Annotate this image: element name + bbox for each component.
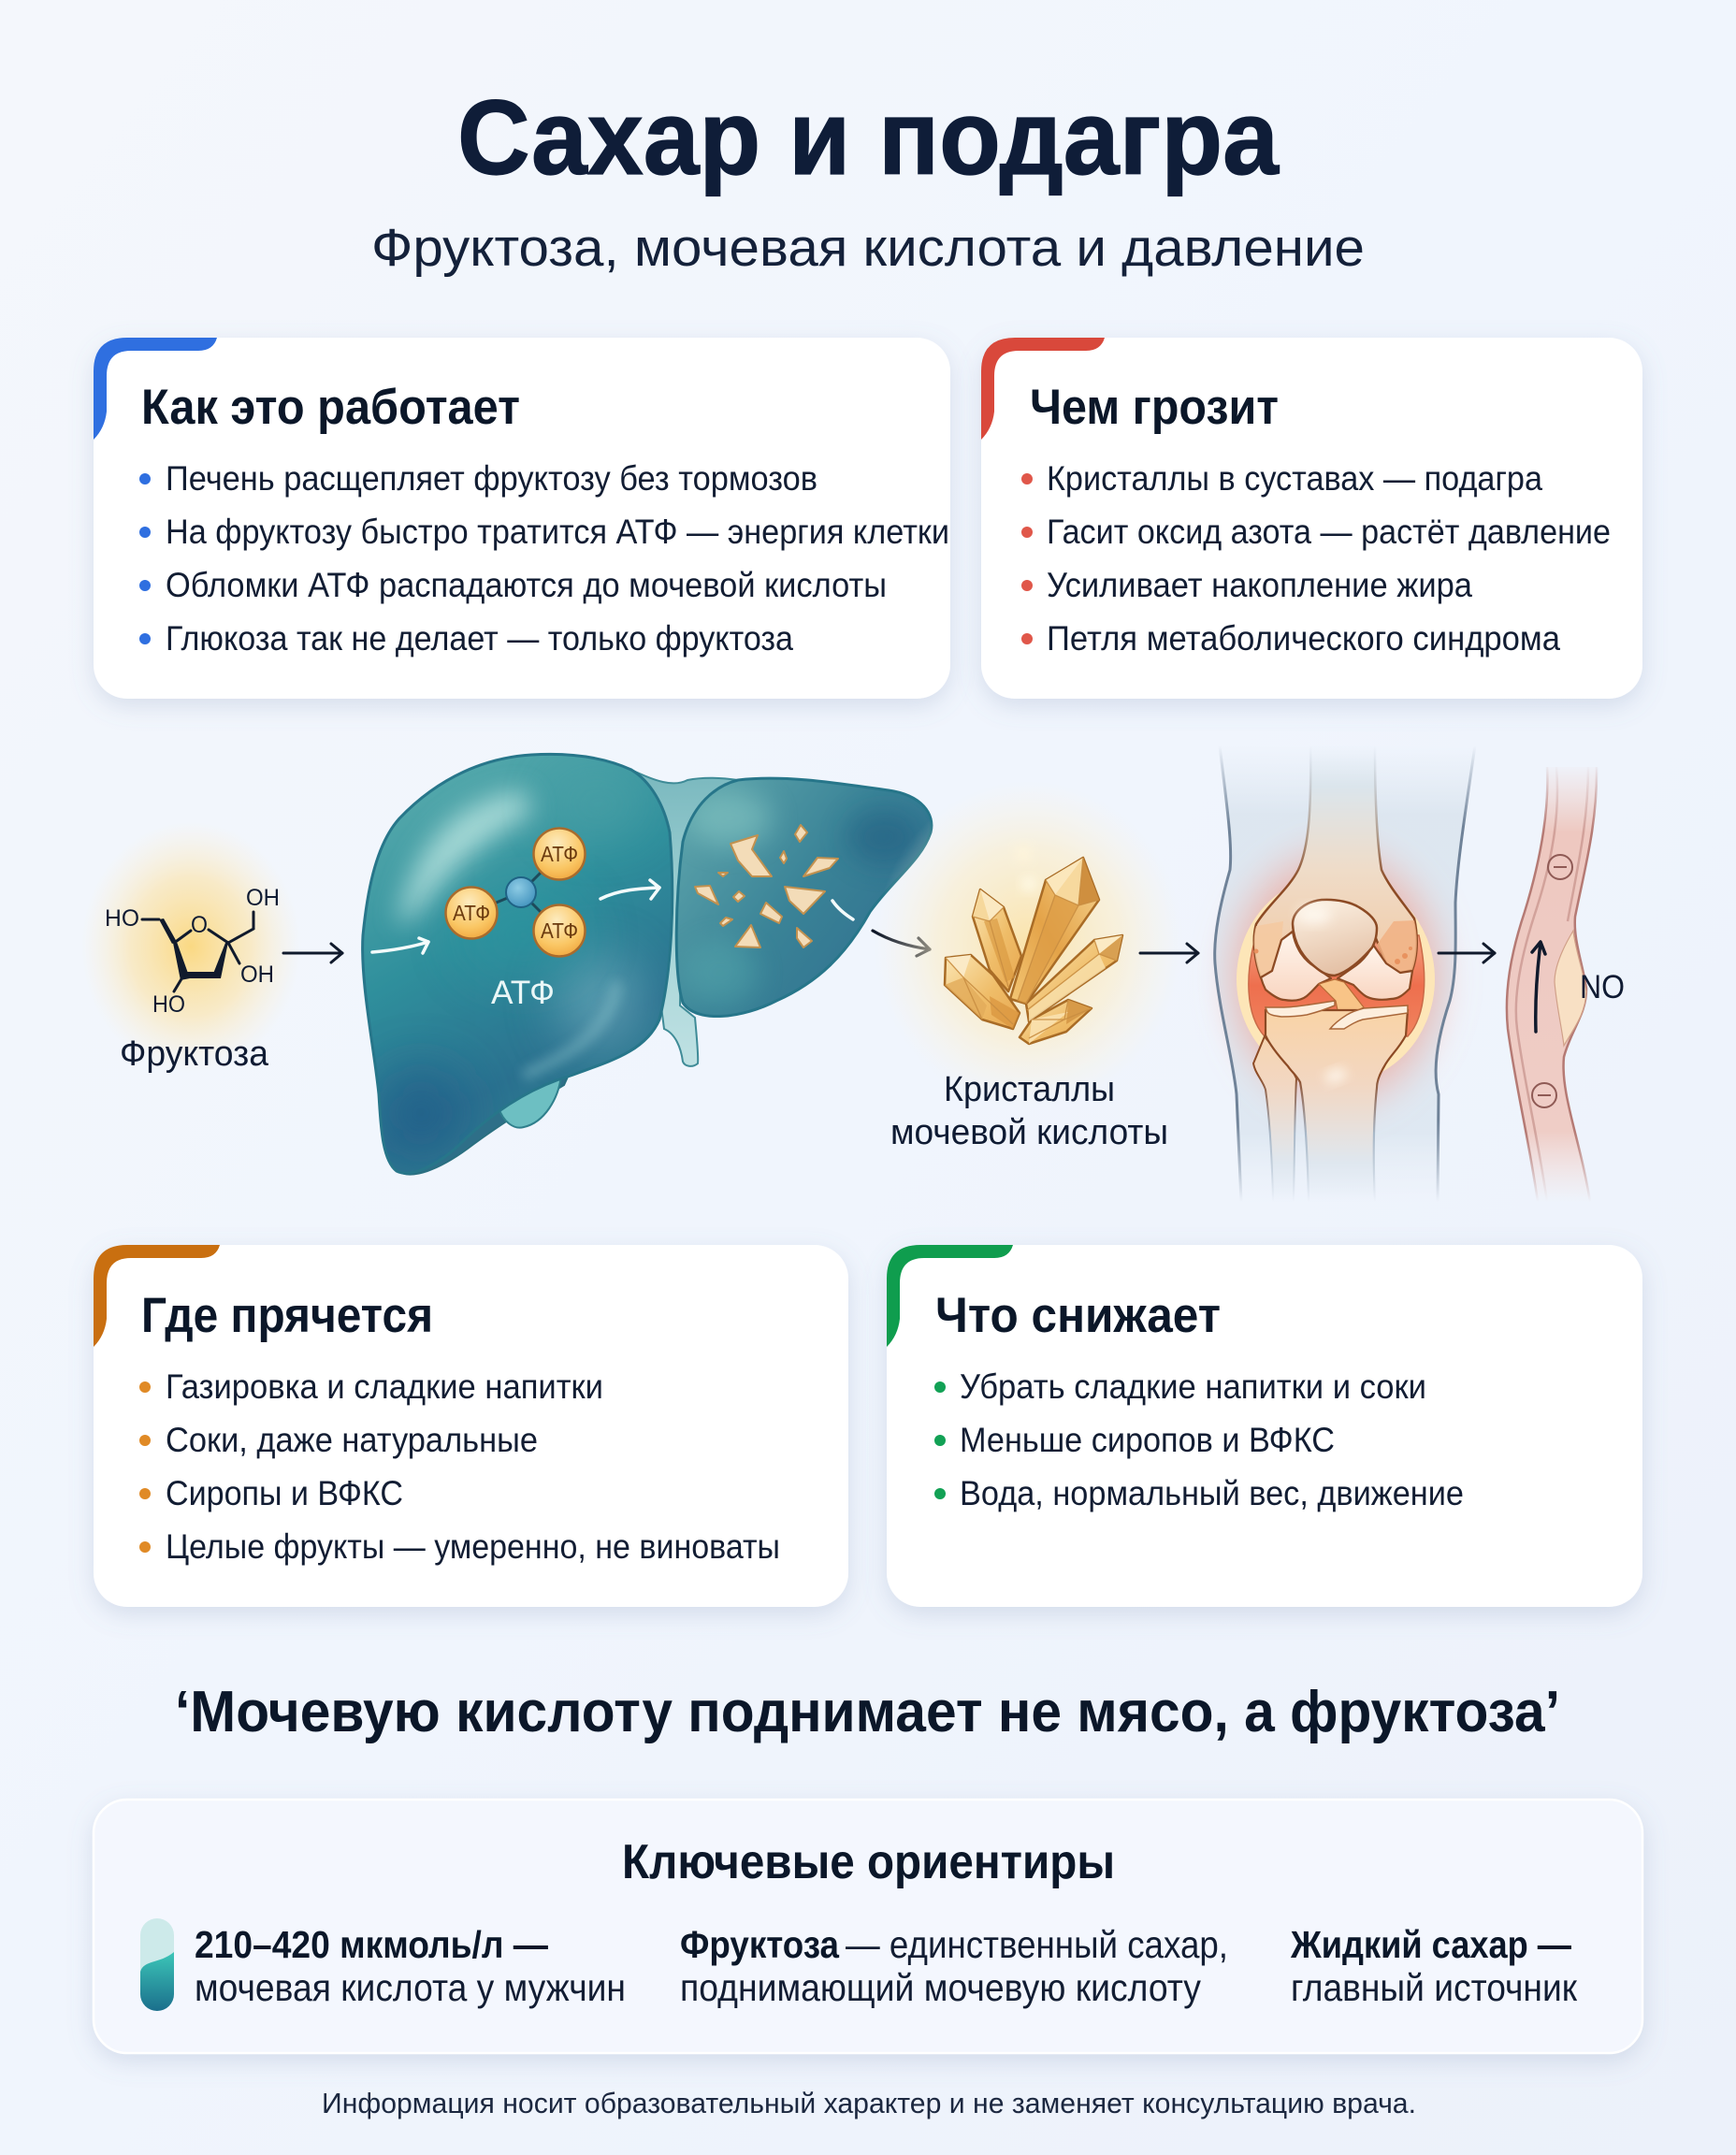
heading: where it hides: Где прячется xyxy=(141,1288,433,1343)
crystal facets xyxy=(945,858,1122,1044)
vessel wall xyxy=(1507,767,1597,1202)
label: uric acid crystals xyxy=(890,1070,1168,1152)
femur xyxy=(1254,745,1417,977)
cruciate ligament xyxy=(1319,979,1364,1017)
uric acid shards xyxy=(695,825,838,947)
patella xyxy=(1293,900,1377,976)
bullet list: what lowers it: Вода, нормальный вес, движение xyxy=(960,1473,1464,1512)
crystal: center tall xyxy=(1010,858,1099,1004)
arrow: crystals to knee xyxy=(1140,944,1198,962)
joint capsule xyxy=(1237,875,1435,1084)
bullet list: where it hides: Сиропы и ВФКС xyxy=(166,1473,403,1512)
crystal: bottom xyxy=(1020,1000,1092,1044)
femoral condyles xyxy=(1261,932,1331,1001)
bullet list: what lowers it: Убрать сладкие напитки и соки xyxy=(960,1367,1426,1406)
bullet list: how it works: Глюкоза так не делает — только фруктоза xyxy=(166,618,793,658)
reference: uric acid range: 210–420 мкмоль/л — xyxy=(195,1923,548,1966)
fructose glow and molecule: HO xyxy=(105,905,139,932)
bullet list: what lowers it: Меньше сиропов и ВФКС xyxy=(960,1420,1335,1459)
label: uric acid crystals: Кристаллы xyxy=(944,1070,1115,1109)
heading: how it works: Как это работает xyxy=(141,380,520,435)
footer disclaimer: Информация носит образовательный характер и не заменяет консультацию врача. xyxy=(322,2087,1416,2119)
crystal: left low xyxy=(945,955,1020,1029)
menisci xyxy=(1266,1001,1335,1017)
reference: uric acid range xyxy=(195,1923,626,2009)
bullet list: risks: Кристаллы в суставах — подагра xyxy=(1047,458,1542,498)
illustration: uric acid crystals xyxy=(875,781,1183,1108)
illustration: liver xyxy=(363,754,932,1175)
liver back fold xyxy=(398,1066,572,1175)
bullet list: risks xyxy=(1021,458,1611,658)
crystal: left tall xyxy=(973,889,1021,991)
bullet list: how it works: Печень расщепляет фруктозу без тормозов xyxy=(166,458,817,498)
tibia xyxy=(1266,1010,1408,1202)
orange speckled femur sides xyxy=(1253,920,1417,977)
illustration: knee joint xyxy=(1209,745,1475,1202)
title: Сахар и подагра xyxy=(457,79,1280,196)
vessel outlines xyxy=(1507,767,1597,1202)
leg soft tissue xyxy=(1215,745,1475,1202)
arrow: fructose to liver xyxy=(283,944,342,962)
fructose glow and molecule xyxy=(80,820,301,1073)
fructose glow and molecule: O xyxy=(191,912,208,938)
inhibition marks xyxy=(1532,855,1572,1107)
panel: where it hides xyxy=(94,1245,848,1607)
panel: what lowers it xyxy=(887,1245,1642,1607)
panel: how it works xyxy=(94,338,950,699)
bullet list: how it works: На фруктозу быстро тратится АТФ — энергия клетки xyxy=(166,512,949,551)
subtitle: Фруктоза, мочевая кислота и давление xyxy=(371,218,1365,278)
fructose glow and molecule: OH xyxy=(240,962,274,988)
bullet list: how it works xyxy=(139,458,949,658)
illustration: blood vessel xyxy=(1507,767,1625,1202)
ATP molecule cluster: АТФ xyxy=(541,842,578,866)
label: ATP: АТФ xyxy=(491,975,555,1011)
reference: fructose xyxy=(680,1923,1228,2009)
plaque xyxy=(1555,931,1586,1046)
reference: fructose: Фруктоза xyxy=(680,1923,840,1966)
right lobe xyxy=(676,778,932,1017)
quote: ‘Мочевую кислоту поднимает не мясо, а фруктоза’ xyxy=(175,1680,1560,1744)
fructose glow and molecule: OH xyxy=(246,885,280,911)
reference: uric acid range: мочевая кислота у мужчин xyxy=(195,1966,626,2009)
bullet list: risks: Гасит оксид азота — растёт давление xyxy=(1047,512,1611,551)
icon: level pill xyxy=(140,1918,174,2011)
arrow: liver to crystals xyxy=(873,931,930,956)
label: fructose: Фруктоза xyxy=(120,1034,269,1074)
arrow: knee to vessel xyxy=(1439,944,1495,962)
left lobe xyxy=(363,754,673,1173)
fructose glow and molecule: HO xyxy=(152,991,185,1018)
pressure arrow xyxy=(1532,942,1545,1032)
bullet list: where it hides: Газировка и сладкие напитки xyxy=(166,1367,603,1406)
inflammation glow xyxy=(1209,828,1462,1127)
bullet list: where it hides: Соки, даже натуральные xyxy=(166,1420,538,1459)
ATP molecule cluster xyxy=(445,829,586,956)
label: NO: NO xyxy=(1580,969,1625,1005)
label: uric acid crystals: мочевой кислоты xyxy=(890,1113,1168,1152)
panel: key reference points xyxy=(94,1800,1642,2053)
reference: liquid sugar: Жидкий сахар — xyxy=(1290,1923,1571,1966)
panel: risks xyxy=(981,338,1642,699)
reference: liquid sugar: главный источник xyxy=(1291,1966,1578,2009)
bullet list: risks: Усиливает накопление жира xyxy=(1047,565,1472,604)
inflamed joint space xyxy=(1249,935,1425,1036)
ATP molecule cluster: АТФ xyxy=(453,901,490,925)
bullet list: where it hides: Целые фрукты — умеренно, не виноваты xyxy=(166,1526,780,1566)
bullet list: risks: Петля метаболического синдрома xyxy=(1047,618,1560,658)
leg outlines xyxy=(1215,745,1475,1202)
white arrows inside the liver xyxy=(372,880,853,953)
bullet list: how it works: Обломки АТФ распадаются до мочевой кислоты xyxy=(166,565,887,604)
heading: risks: Чем грозит xyxy=(1030,380,1279,435)
ligament band xyxy=(631,770,738,1066)
bullet list: what lowers it xyxy=(934,1367,1464,1512)
reference: fructose: — единственный сахар, xyxy=(846,1923,1228,1966)
heading: key reference points: Ключевые ориентиры xyxy=(622,1835,1115,1889)
fibula xyxy=(1253,1036,1296,1202)
crystal: right xyxy=(1026,935,1122,1021)
ATP molecule cluster: АТФ xyxy=(541,918,578,943)
gallbladder xyxy=(499,1076,561,1128)
heading: what lowers it: Что снижает xyxy=(935,1288,1221,1343)
reference: liquid sugar xyxy=(1290,1923,1578,2009)
reference: fructose: поднимающий мочевую кислоту xyxy=(680,1966,1201,2009)
bullet list: where it hides xyxy=(139,1367,780,1566)
